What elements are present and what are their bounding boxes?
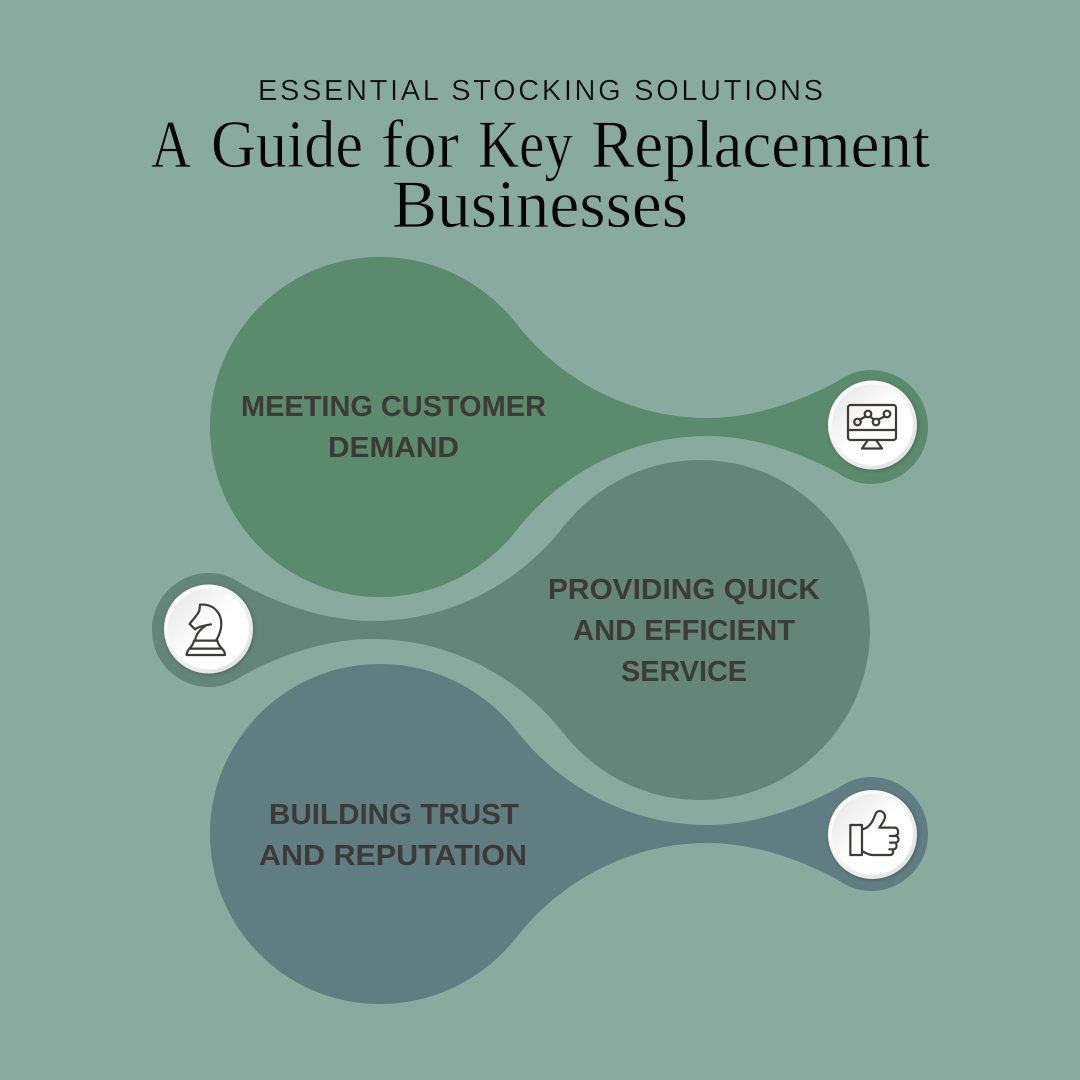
- panel: building trust and reputation: [210, 664, 928, 1004]
- label one: DEMAND: [328, 432, 459, 464]
- title line one: A: [151, 106, 191, 182]
- panel: providing quick and efficient service: [152, 460, 870, 800]
- title line one: Key: [478, 106, 573, 182]
- droplet shape three: [210, 664, 928, 1004]
- droplet shape one: [210, 257, 928, 597]
- label one: [241, 391, 546, 464]
- title line one: for: [381, 106, 459, 182]
- title line one: [151, 106, 930, 182]
- label two: AND EFFICIENT: [573, 615, 795, 647]
- icon: chess knight: [164, 584, 253, 674]
- label three: AND REPUTATION: [259, 840, 527, 872]
- icon: monitor with line chart: [828, 380, 917, 470]
- icon: thumbs up: [828, 790, 917, 879]
- label two: PROVIDING QUICK: [548, 574, 820, 606]
- title line one: Guide: [211, 106, 363, 182]
- title line one: Replacement: [591, 106, 930, 182]
- label two: [548, 574, 820, 688]
- label two: SERVICE: [621, 656, 747, 688]
- label one: MEETING CUSTOMER: [241, 391, 546, 423]
- title line two: Businesses: [392, 166, 688, 242]
- subtitle: ESSENTIAL STOCKING SOLUTIONS: [258, 75, 823, 107]
- panel: meeting customer demand: [210, 257, 928, 597]
- heading block: [151, 75, 930, 242]
- droplet shape two: [152, 460, 870, 800]
- label three: [259, 799, 527, 872]
- label three: BUILDING TRUST: [269, 799, 519, 831]
